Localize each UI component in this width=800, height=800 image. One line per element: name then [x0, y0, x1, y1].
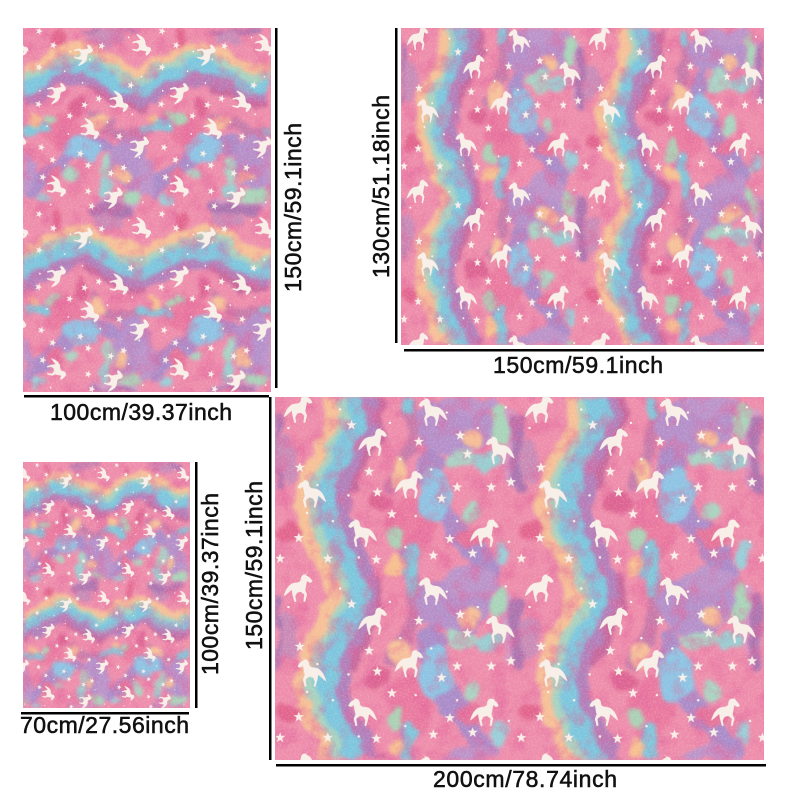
width dimension line	[24, 395, 269, 398]
width label: 70cm/27.56inch	[20, 712, 189, 738]
height dimension line	[195, 462, 198, 708]
width label: 150cm/59.1inch	[493, 352, 663, 378]
blanket: small unicorn print	[23, 462, 190, 708]
height label: 100cm/39.37inch	[197, 493, 223, 675]
width dimension line	[404, 349, 764, 352]
blanket: unicorn print	[401, 28, 764, 345]
blanket: large unicorn print	[275, 397, 764, 760]
width dimension line	[276, 764, 766, 766]
panel: 70x100 cm blanket	[20, 462, 223, 738]
width label: 200cm/78.74inch	[433, 766, 617, 792]
height dimension line	[269, 397, 272, 760]
blanket: tall unicorn print	[23, 28, 271, 392]
panel: 150x130 cm blanket	[368, 28, 764, 378]
width label: 100cm/39.37inch	[50, 399, 232, 425]
height dimension line	[395, 28, 398, 343]
height label: 150cm/59.1inch	[241, 481, 267, 650]
height dimension line	[275, 28, 278, 388]
panel: 200x150 cm blanket	[241, 397, 766, 792]
height label: 130cm/51.18inch	[368, 95, 394, 278]
height label: 150cm/59.1inch	[280, 123, 306, 292]
panel: 100x150 cm blanket	[23, 28, 306, 425]
width dimension line	[21, 712, 189, 714]
